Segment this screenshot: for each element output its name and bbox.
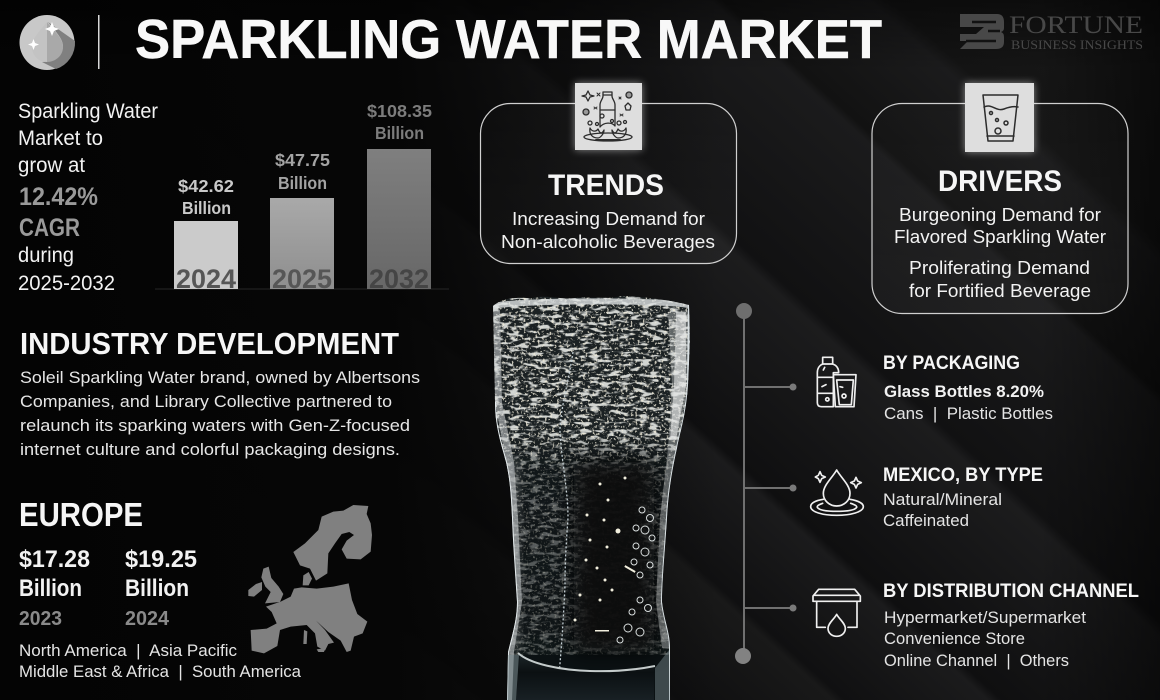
panel: drivers [872,83,1128,314]
panel: industry development: INDUSTRY DEVELOPMENT [20,326,399,361]
glass of sparkling water [485,290,700,700]
panel: drivers: Flavored Sparkling Water [894,226,1106,247]
category: by distribution channel: Hypermarket/Supermarket [884,609,1086,627]
CAGR text block: 2025-2032 [18,272,115,295]
icon: glass of water [983,95,1018,141]
category: by packaging: BY PACKAGING [883,352,1020,374]
category: by distribution channel: BY DISTRIBUTION CHANNEL [883,580,1139,602]
header divider [98,15,100,69]
panel: europe: North America | Asia Pacific [19,642,237,660]
panel: europe: 2024 [125,608,170,630]
panel: drivers: Burgeoning Demand for [899,204,1101,225]
brand logo: FORTUNE [1009,12,1143,39]
bar chart: Billion [375,123,424,143]
bar chart: $108.35 [367,101,432,121]
bar chart: $42.62 [178,176,234,196]
icon: packaging bottle and glass [817,357,856,407]
bar chart: 2032 [369,264,429,294]
category: by packaging [883,352,1053,423]
CAGR text block [18,100,158,295]
panel: drivers: for Fortified Beverage [909,280,1091,301]
bubbles [617,507,655,643]
panel: industry development: Companies, and Library Collective partnered to [20,392,392,411]
logo icon: sparkling drop [20,15,75,70]
brand logo: BUSINESS INSIGHTS [1011,38,1143,52]
CAGR text block: CAGR [19,214,80,242]
icon: water drop with sparkles [811,470,863,515]
glass rim and walls [493,301,690,700]
panel: industry development: relaunch its sparking waters with Gen-Z-focused [20,416,410,435]
category: by packaging: Glass Bottles 8.20% [884,382,1044,401]
bar chart: 2025 [272,264,332,294]
bar chart: Billion [278,173,327,193]
glass base [507,650,670,700]
bar chart: Billion [182,198,231,218]
bar chart: $47.75 [275,150,330,170]
panel: europe: $19.25 [125,546,197,573]
CAGR text block: 12.42% [19,183,98,211]
category: mexico by type: MEXICO, BY TYPE [883,464,1043,486]
bar chart [155,101,449,294]
timeline connector [735,303,796,664]
category: mexico by type [883,464,1043,530]
panel: trends [480,83,736,264]
panel: europe [19,496,302,681]
CAGR text block: grow at [18,154,85,177]
panel: trends: Increasing Demand for [512,208,705,229]
panel: europe: 2023 [19,608,62,630]
icon: distribution store [813,589,860,636]
panel: industry development [20,326,420,459]
map: europe [248,505,372,653]
bar chart: 2024 [176,264,236,294]
category: by distribution channel: Online Channel | Others [884,652,1069,670]
panel: trends: Non-alcoholic Beverages [501,231,715,252]
category: by packaging: Cans | Plastic Bottles [884,405,1053,423]
panel: trends: TRENDS [548,169,664,202]
CAGR text block: Market to [18,127,103,150]
panel: drivers: Proliferating Demand [909,257,1090,278]
category: mexico by type: Caffeinated [883,512,969,530]
panel: europe: Billion [19,575,82,602]
panel: drivers: DRIVERS [938,165,1062,198]
panel: europe: Middle East & Africa | South America [19,663,302,681]
icon: bottle splash [582,91,632,141]
brand logo [960,12,1143,52]
panel: industry development: Soleil Sparkling Water brand, owned by Albertsons [20,368,420,387]
panel: europe: $17.28 [19,546,90,573]
title: SPARKLING WATER MARKET [135,8,882,70]
panel: europe: Billion [125,575,189,602]
panel: europe: EUROPE [19,496,143,533]
category: by distribution channel: Convenience Store [884,630,1025,648]
panel: industry development: internet culture and colorful packaging designs. [20,440,400,459]
category: by distribution channel [883,580,1139,670]
category: mexico by type: Natural/Mineral [883,491,1002,509]
CAGR text block: during [18,244,74,267]
CAGR text block: Sparkling Water [18,100,158,123]
